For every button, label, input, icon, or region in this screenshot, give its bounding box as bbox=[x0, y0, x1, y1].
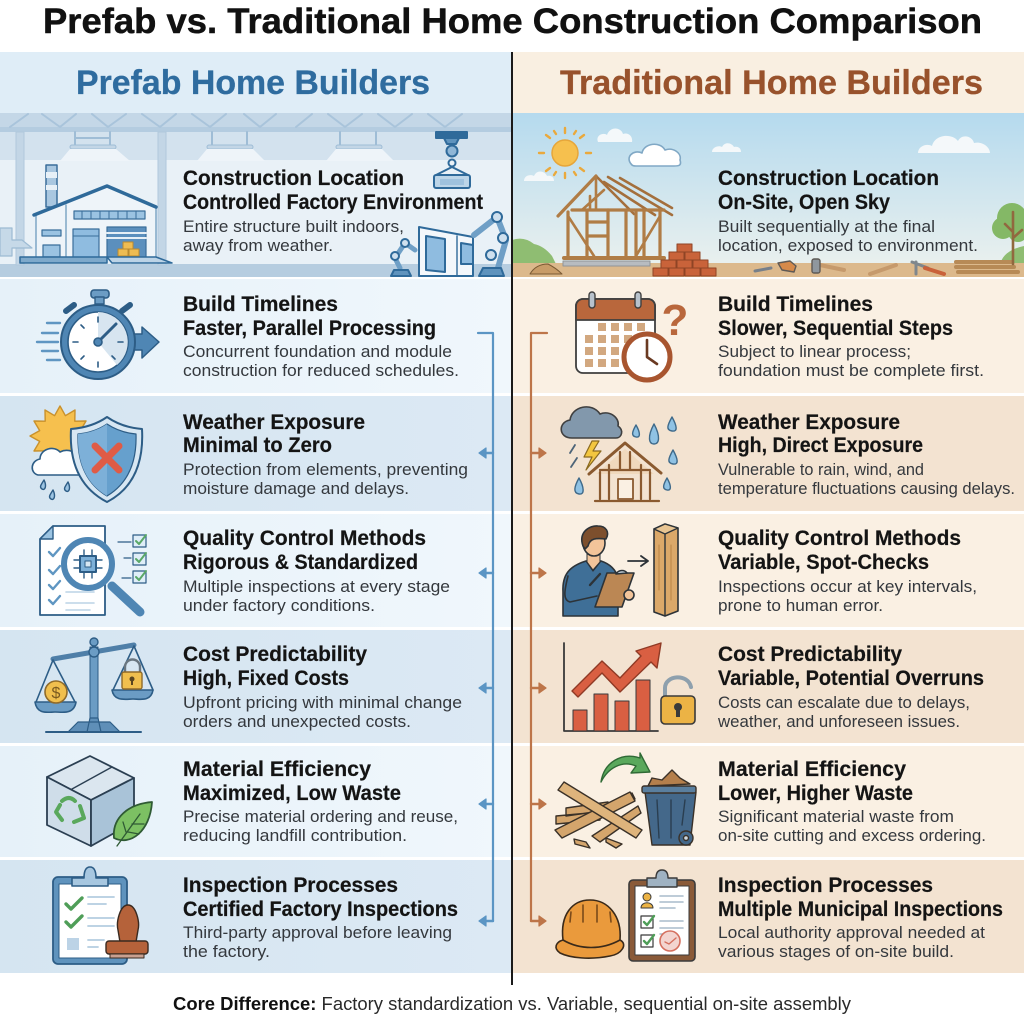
icon: calendar clock bbox=[576, 292, 688, 381]
text: prefab material: reducing landfill contribution. bbox=[183, 827, 407, 845]
icon: inspector and timber post bbox=[563, 524, 678, 616]
text: traditional weather: High, Direct Exposure bbox=[718, 434, 923, 457]
icon: calendar clock: ? bbox=[662, 296, 688, 345]
text: prefab location: Controlled Factory Environment bbox=[183, 191, 483, 214]
text: traditional cost: Cost Predictability bbox=[718, 643, 902, 666]
icon: tools bbox=[530, 259, 1018, 274]
text: traditional weather: temperature fluctuations causing delays. bbox=[718, 480, 1015, 498]
text: traditional timelines bbox=[718, 293, 984, 380]
text: prefab weather bbox=[183, 411, 468, 498]
text: prefab timelines: Build Timelines bbox=[183, 293, 338, 316]
text: traditional timelines: Build Timelines bbox=[718, 293, 873, 316]
icon: rising cost chart and lock bbox=[564, 643, 695, 731]
panel: prefab build timelines bbox=[0, 279, 512, 393]
text: traditional quality bbox=[718, 527, 977, 615]
text: traditional timelines: Slower, Sequential Steps bbox=[718, 317, 953, 340]
panel: traditional weather exposure bbox=[512, 396, 1024, 511]
text: traditional quality: Variable, Spot-Checks bbox=[718, 551, 929, 574]
panel: traditional inspection processes bbox=[512, 860, 1024, 973]
icon: inspection magnifier bbox=[40, 526, 146, 615]
text: traditional inspection: various stages of on-site build. bbox=[718, 943, 954, 961]
text: prefab cost: orders and unexpected costs. bbox=[183, 713, 411, 731]
text: prefab weather: moisture damage and delays. bbox=[183, 480, 409, 498]
icon: recycled box and leaf bbox=[47, 756, 152, 846]
icon: factory crane hook bbox=[434, 132, 470, 188]
text: traditional inspection: Multiple Municipal Inspections bbox=[718, 898, 1003, 921]
panel: traditional construction location bbox=[512, 113, 1024, 277]
text: traditional cost: Costs can escalate due to delays, bbox=[718, 694, 970, 712]
panel: traditional header bbox=[512, 52, 1024, 113]
panel: prefab cost predictability bbox=[0, 630, 512, 743]
icon: tree bbox=[992, 203, 1024, 264]
icon: storm over house bbox=[561, 407, 677, 501]
text: traditional material: on-site cutting and excess ordering. bbox=[718, 827, 986, 845]
panel: prefab construction location bbox=[0, 113, 512, 277]
connector: prefab arrows bbox=[478, 333, 493, 926]
text: prefab timelines: construction for reduced schedules. bbox=[183, 362, 459, 380]
text: prefab cost bbox=[183, 643, 462, 731]
text: traditional material: Lower, Higher Waste bbox=[718, 782, 913, 805]
panel: prefab header bbox=[0, 52, 512, 113]
text: traditional location: location, exposed to environment. bbox=[718, 237, 978, 255]
text: prefab inspection bbox=[183, 874, 458, 961]
panel: traditional material efficiency bbox=[512, 746, 1024, 857]
text: prefab material bbox=[183, 758, 458, 845]
text: traditional material: Significant material waste from bbox=[718, 808, 954, 826]
panel: prefab material efficiency bbox=[0, 746, 512, 857]
text: traditional inspection: Inspection Processes bbox=[718, 874, 933, 897]
text: prefab material: Maximized, Low Waste bbox=[183, 782, 401, 805]
text: prefab material: Precise material ordering and reuse, bbox=[183, 808, 458, 826]
icon: balance scale: $ bbox=[52, 685, 61, 702]
text: prefab location bbox=[183, 167, 483, 255]
panel: traditional cost predictability bbox=[512, 630, 1024, 743]
text: prefab quality: Multiple inspections at every stage bbox=[183, 578, 450, 596]
icon: clouds bbox=[524, 128, 990, 181]
text: prefab location: Construction Location bbox=[183, 167, 404, 190]
text: prefab material: Material Efficiency bbox=[183, 758, 371, 781]
text: prefab timelines bbox=[183, 293, 459, 380]
text: traditional inspection: Local authority approval needed at bbox=[718, 924, 985, 942]
text: prefab quality: Rigorous & Standardized bbox=[183, 551, 418, 574]
text: traditional cost: Variable, Potential Overruns bbox=[718, 667, 984, 690]
text: prefab weather: Protection from elements, preventing bbox=[183, 461, 468, 479]
text: prefab timelines: Faster, Parallel Processing bbox=[183, 317, 436, 340]
text: traditional inspection bbox=[718, 874, 1003, 961]
text: traditional quality: prone to human error. bbox=[718, 597, 883, 615]
icon: timber house frame bbox=[558, 176, 672, 266]
title: Prefab vs. Traditional Home Construction Comparison bbox=[43, 2, 982, 41]
text: traditional cost bbox=[717, 643, 984, 731]
text: traditional weather bbox=[718, 411, 1015, 498]
icon: brick pile bbox=[653, 244, 716, 276]
icon: clipboard and stamp bbox=[53, 867, 148, 964]
icon: robot arms and wall module bbox=[391, 212, 508, 276]
text: prefab location: Entire structure built indoors, bbox=[183, 218, 404, 236]
text: prefab quality: under factory conditions. bbox=[183, 597, 375, 615]
text: traditional timelines: Subject to linear process; bbox=[718, 343, 911, 361]
icon: stopwatch bbox=[37, 290, 159, 379]
text: prefab location: away from weather. bbox=[183, 237, 333, 255]
text: traditional quality: Quality Control Methods bbox=[718, 527, 961, 550]
icon: balance scale bbox=[35, 638, 153, 732]
text: prefab inspection: the factory. bbox=[183, 943, 270, 961]
text: traditional material: Material Efficiency bbox=[718, 758, 906, 781]
footer: core difference: Core Difference: Factory standardization vs. Variable, sequential on-site assembly bbox=[173, 994, 851, 1014]
text: prefab cost: High, Fixed Costs bbox=[183, 667, 349, 690]
icon: wood scraps and waste bin bbox=[555, 753, 696, 848]
icon: sun bbox=[539, 128, 591, 178]
text: traditional weather: Weather Exposure bbox=[718, 411, 900, 434]
text: prefab weather: Weather Exposure bbox=[183, 411, 365, 434]
center divider bbox=[511, 52, 513, 985]
text: traditional location: Construction Location bbox=[718, 167, 939, 190]
text: traditional material bbox=[718, 758, 986, 845]
text: prefab inspection: Third-party approval before leaving bbox=[183, 924, 452, 942]
text: traditional weather: Vulnerable to rain, wind, and bbox=[718, 461, 924, 479]
text: prefab quality bbox=[183, 527, 450, 615]
text: prefab inspection: Certified Factory Inspections bbox=[183, 898, 458, 921]
text: prefab weather: Minimal to Zero bbox=[183, 434, 332, 457]
text: prefab inspection: Inspection Processes bbox=[183, 874, 398, 897]
connector: traditional arrows bbox=[531, 333, 547, 926]
panel: prefab quality control bbox=[0, 514, 512, 627]
text: traditional cost: weather, and unforeseen issues. bbox=[717, 713, 960, 731]
heading: traditional: Traditional Home Builders bbox=[560, 64, 983, 102]
icon: sun cloud shield bbox=[30, 406, 142, 502]
icon: factory building bbox=[0, 165, 172, 263]
panel: prefab inspection processes bbox=[0, 860, 512, 973]
icon: hard hat bbox=[556, 900, 624, 958]
panel: traditional build timelines bbox=[512, 279, 1024, 393]
text: traditional quality: Inspections occur at key intervals, bbox=[718, 578, 977, 596]
text: prefab quality: Quality Control Methods bbox=[183, 527, 426, 550]
text: prefab cost: Cost Predictability bbox=[183, 643, 367, 666]
text: traditional location: Built sequentially at the final bbox=[718, 218, 935, 236]
text: traditional location bbox=[718, 167, 978, 255]
heading: prefab: Prefab Home Builders bbox=[76, 64, 430, 102]
text: traditional location: On-Site, Open Sky bbox=[718, 191, 890, 214]
factory ceiling bbox=[0, 114, 512, 265]
text: prefab cost: Upfront pricing with minimal change bbox=[183, 694, 462, 712]
text: traditional timelines: foundation must be complete first. bbox=[718, 362, 984, 380]
panel: traditional quality control bbox=[512, 514, 1024, 627]
icon: inspection clipboard bbox=[629, 870, 695, 961]
panel: prefab weather exposure bbox=[0, 396, 512, 511]
text: prefab timelines: Concurrent foundation and module bbox=[183, 343, 452, 361]
